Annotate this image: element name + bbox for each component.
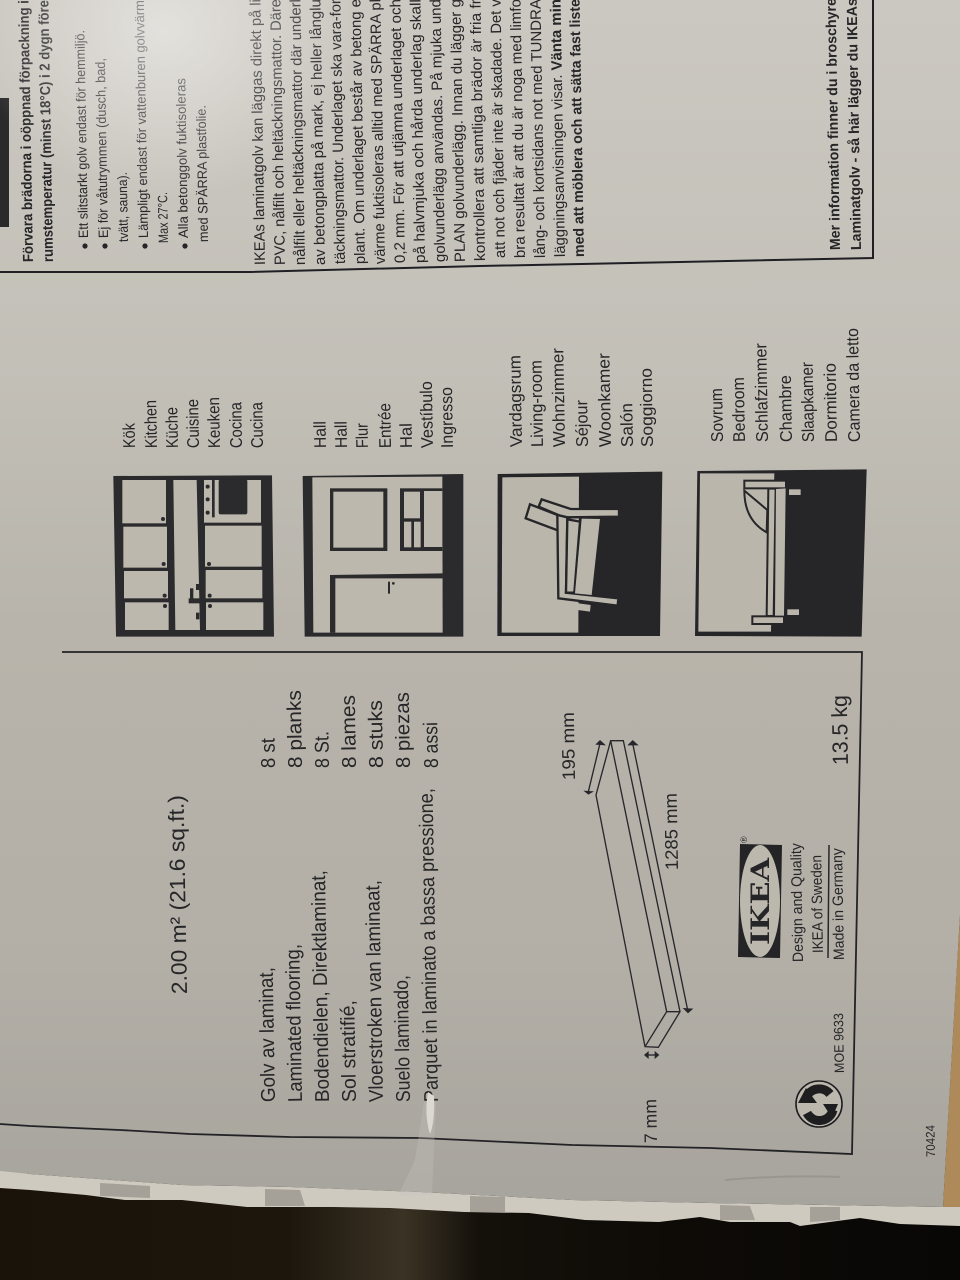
icon: bedroom bed — [695, 469, 867, 637]
room list: bedroom — [707, 328, 864, 442]
plank quantities: 8 lames — [338, 695, 361, 768]
room list: hall: Hal — [397, 423, 416, 448]
room list: living room: Séjour — [572, 400, 592, 447]
room list: hall: Ingresso — [437, 387, 457, 448]
icon: kitchen — [113, 475, 274, 637]
storage instructions heading — [16, 0, 57, 262]
print code: 70424 — [923, 1125, 938, 1157]
body text: laying instructions: kontrollera att samtliga brädor är fria fr — [467, 0, 489, 261]
body text: laying instructions: nålfilt eller heltäckningsmattor där underl — [287, 0, 309, 265]
body text: laying instructions: av betongplatta på mark, ej heller långlu — [307, 0, 329, 265]
worn patches on the torn edge — [100, 1183, 840, 1222]
bullet list: usage notes: med SPÄRRA plastfolie. — [194, 105, 211, 242]
body text: laying instructions: bra resultat är att du är noga med limfo — [507, 0, 529, 258]
product names in seven languages: Vloerstroken van laminaat, — [362, 880, 388, 1102]
body text: laying instructions: på halvmjuka och hårda underlag skall — [407, 0, 429, 263]
icon: hall — [303, 474, 463, 637]
further information note: Laminatgolv - så här lägger du IKEAs — [845, 0, 865, 250]
room list: kitchen: Küche — [162, 407, 182, 448]
room list: hall: Hall — [332, 421, 351, 448]
background: dark surface under the box — [0, 1150, 960, 1280]
plank quantities: 8 st — [257, 738, 280, 768]
manufacturer lines: IKEA of Sweden — [808, 855, 827, 953]
body text: laying instructions: plant. Om underlaget består av betong e — [347, 0, 369, 264]
room list: bedroom: Chambre — [776, 375, 796, 442]
room list: living room: Salón — [617, 403, 637, 447]
room list: kitchen: Kitchen — [141, 400, 161, 448]
room list: bedroom: Dormitorio — [821, 363, 841, 442]
product names in seven languages: Suelo laminado, — [391, 975, 415, 1102]
room list: kitchen: Cuisine — [183, 399, 203, 448]
IKEA logo — [738, 836, 782, 958]
room list: kitchen: Keuken — [204, 397, 224, 448]
body text: laying instructions: lång- och kortsidans not med TUNDRA — [527, 0, 549, 258]
body text: laying instructions: läggningsanvisningen visar. Vänta min — [547, 0, 569, 257]
room list: living room: Woonkamer — [594, 353, 615, 447]
room list: bedroom: Slaapkamer — [798, 362, 818, 442]
room list: bedroom: Bedroom — [729, 377, 749, 442]
bullet list: usage notes: Alla betonggolv fuktisoleras — [173, 78, 191, 238]
body text: laying instructions: golvunderlägg användas. På mjuka und — [427, 0, 449, 262]
background: wood edge — [943, 915, 960, 1225]
dimension: thickness: 7 mm — [640, 1099, 661, 1143]
frame: upper instructions box — [0, 0, 873, 272]
body text: laying instructions: PLAN golvunderlägg. Innan du lägger g — [447, 0, 469, 262]
crease near bottom — [725, 1176, 840, 1180]
plank quantities: 8 St. — [311, 731, 334, 768]
room list: kitchen: Cucina — [247, 401, 267, 448]
icon: recycling symbol — [796, 1081, 842, 1127]
body text: laying instructions: täckningsmattor. Underlaget ska vara-for — [327, 0, 349, 264]
room list: kitchen: Kök — [120, 423, 139, 448]
frame: main product box — [0, 652, 862, 1154]
room list: hall: Hall — [311, 421, 330, 448]
room list: hall — [311, 381, 457, 448]
section tab at top — [0, 98, 9, 227]
plank quantities: 8 assi — [420, 722, 443, 768]
room list: bedroom: Schlafzimmer — [751, 343, 772, 442]
bullet list: usage notes: Ett slitstarkt golv endast för hemmiljö. — [72, 30, 91, 238]
room list: hall: Flur — [353, 423, 372, 448]
IKEA logo: ® — [739, 836, 749, 843]
manufacturer lines — [788, 842, 848, 962]
dimension: width: 195 mm — [558, 712, 579, 780]
plank quantities: 8 planks — [284, 690, 307, 768]
body text: laying instructions: 0,2 mm. För att utjämna underlaget och — [387, 0, 409, 263]
product names in seven languages — [256, 788, 443, 1102]
room list: living room: Wohnzimmer — [548, 348, 569, 447]
further information note — [824, 0, 865, 250]
body text: laying instructions: med att möblera och att sätta fast liste — [567, 0, 588, 257]
body text: laying instructions: IKEAs laminatgolv kan läggas direkt på li — [247, 0, 269, 265]
bullet list: usage notes: tvätt, sauna). — [115, 172, 131, 242]
body text: laying instructions: PVC, nålfilt och heltäckningsmattor. Däre — [267, 0, 289, 265]
plank quantities: 8 piezas — [392, 692, 415, 768]
room list: bedroom: Sovrum — [707, 388, 727, 442]
product coverage: 2.00 m² (21.6 sq.ft.) — [164, 795, 192, 994]
room list: living room — [505, 348, 657, 447]
room list: living room: Living-room — [526, 360, 547, 447]
manufacturer lines: Design and Quality — [788, 842, 807, 962]
body text: laying instructions: att not och fjäder inte är skadade. Det v — [487, 0, 509, 258]
article code: MOE 9633 — [831, 1013, 847, 1073]
body text: laying instructions: värme fuktisoleras alltid med SPÄRRA pl — [367, 0, 389, 264]
product names in seven languages: Sol stratifié, — [337, 1000, 361, 1102]
manufacturer lines: Made in Germany — [829, 847, 848, 960]
body text: laying instructions — [247, 0, 588, 265]
room list: hall: Entrée — [375, 403, 395, 448]
room list: living room: Soggiorno — [637, 368, 657, 447]
product names in seven languages: Bodendielen, Direktlaminat, — [308, 870, 334, 1102]
bullet list: usage notes: Ej för våtutrymmen (dusch, bad, — [93, 58, 111, 238]
bullet list: usage notes — [72, 0, 211, 249]
top-left light glare — [0, 0, 355, 200]
room list: living room: Vardagsrum — [505, 355, 526, 447]
IKEA logo: IKEA — [746, 857, 775, 945]
bullet list: usage notes: Max 27°C. — [155, 192, 171, 243]
icon: living room sofa — [497, 472, 662, 636]
tape patch over the box — [398, 1092, 436, 1196]
room list: hall: Vestíbulo — [417, 381, 437, 448]
product names in seven languages: Parquet in laminato a bassa pressione, — [416, 788, 443, 1102]
room list: kitchen: Cocina — [226, 401, 246, 448]
dimension: length: 1285 mm — [661, 793, 682, 870]
product names in seven languages: Golv av laminat, — [256, 967, 280, 1102]
plank quantities: 8 stuks — [365, 700, 388, 768]
package weight: 13.5 kg — [827, 695, 853, 765]
room list: bedroom: Camera da letto — [843, 328, 864, 442]
plank quantities — [257, 690, 443, 768]
product names in seven languages: Laminated flooring, — [282, 944, 307, 1102]
room list: kitchen — [120, 397, 267, 448]
torn paper edge strip — [0, 1170, 960, 1226]
plank dimension diagram — [583, 740, 693, 1059]
